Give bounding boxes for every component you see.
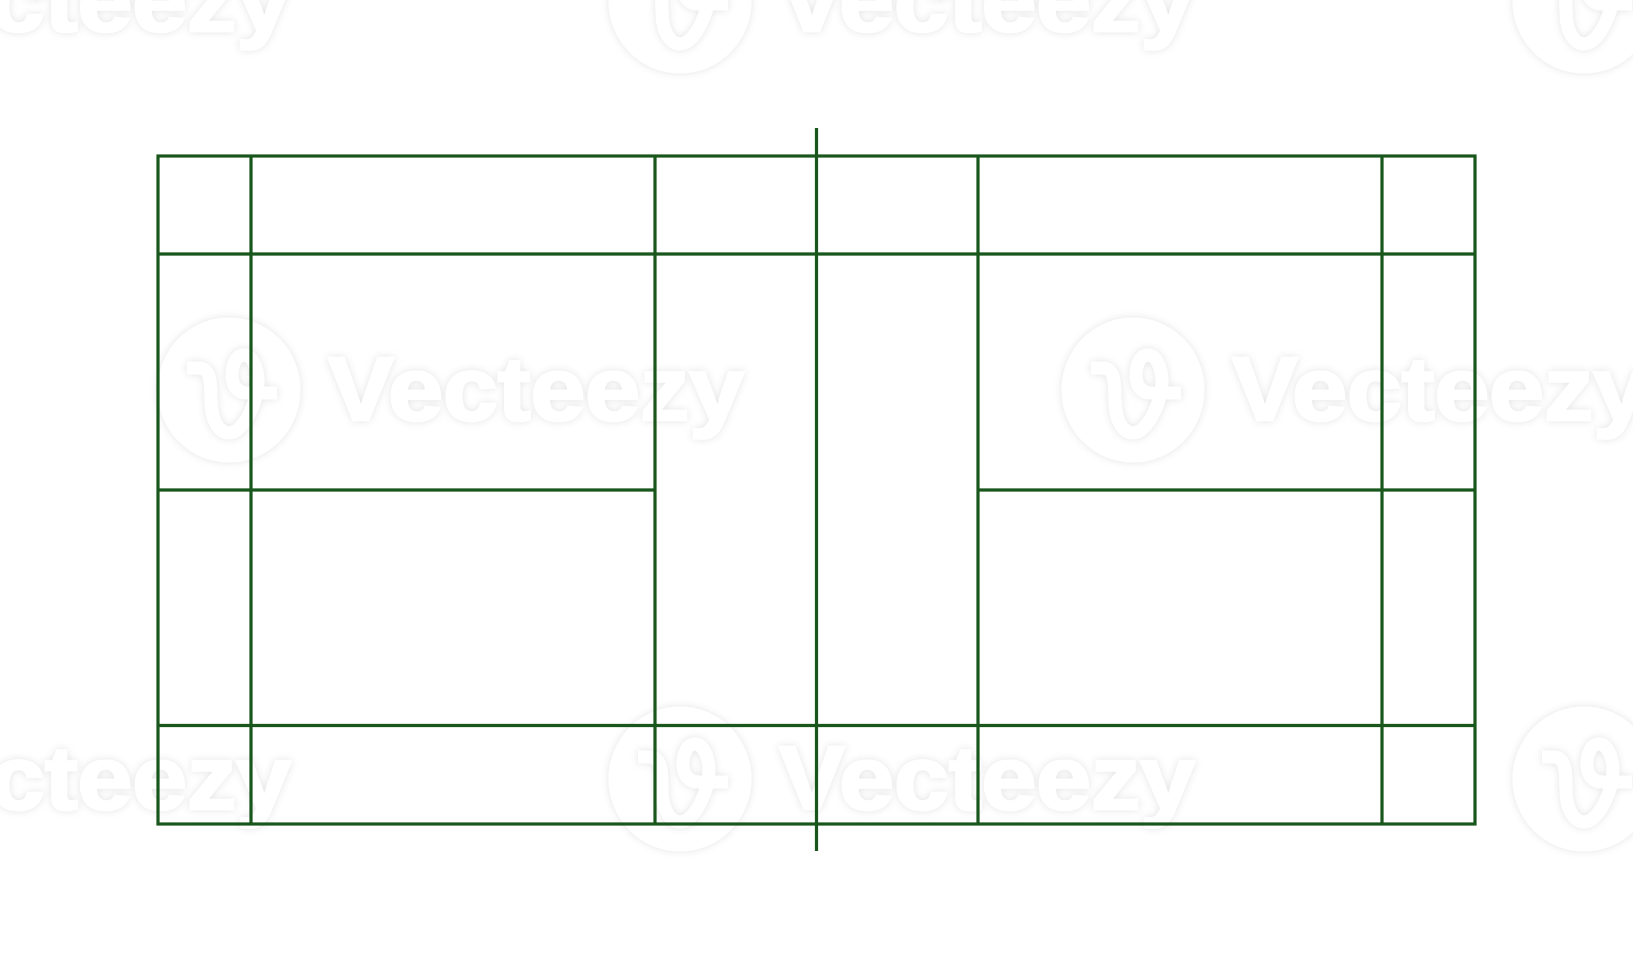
court outer boundary <box>158 156 1475 824</box>
watermark: bottom right <box>1513 707 1633 851</box>
watermark: bottom centre: Vecteezy <box>779 729 1195 829</box>
bottom horizontal line <box>158 724 1475 727</box>
top horizontal line <box>158 252 1475 256</box>
watermark: top right <box>1513 0 1633 73</box>
watermark: middle left <box>158 318 744 462</box>
net centre line <box>815 128 818 851</box>
watermark: middle right <box>1062 318 1633 462</box>
left outer vertical line <box>249 156 253 824</box>
watermark: top centre <box>609 0 1195 73</box>
right centre line <box>978 488 1475 492</box>
left centre line <box>158 488 655 492</box>
watermark: bottom centre <box>609 707 1195 851</box>
left short service line <box>653 156 657 824</box>
right outer vertical line <box>1380 156 1384 824</box>
watermark: middle left: Vecteezy <box>328 340 744 440</box>
badminton court diagram <box>158 128 1475 851</box>
watermark: middle right: Vecteezy <box>1232 340 1633 440</box>
right short service line <box>976 156 980 824</box>
